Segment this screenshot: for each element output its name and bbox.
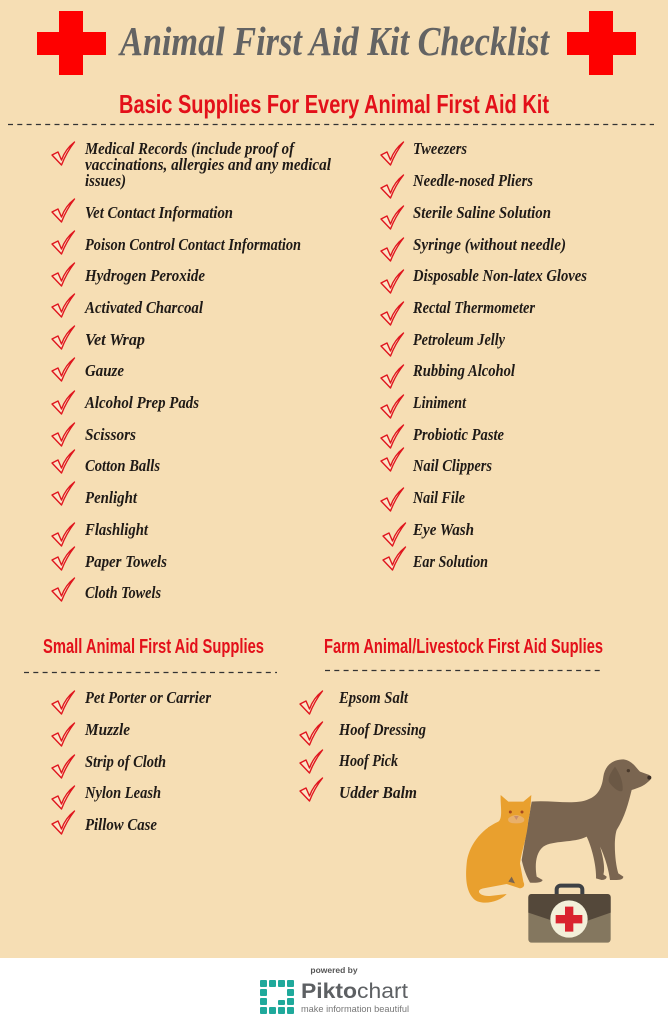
item: pet porter: Pet Porter or Carrier (84, 688, 211, 707)
item: medical records: issues) (85, 171, 126, 190)
heading: small animal supplies: Small Animal First Aid Supplies (43, 636, 264, 658)
icon: cat (466, 795, 531, 903)
item: penlight: Penlight (84, 488, 138, 507)
item: gauze (52, 358, 124, 381)
item: eye wash (383, 520, 474, 546)
item: ear solution (383, 547, 488, 571)
item: medical records (52, 139, 331, 190)
item: poison control: Poison Control Contact Information (84, 235, 301, 254)
item: gloves (381, 266, 587, 293)
item: muzzle: Muzzle (84, 720, 130, 739)
list: basic supplies right column (381, 139, 587, 571)
item: sterile saline (381, 203, 551, 229)
item: muzzle (52, 720, 130, 746)
item: liniment (381, 393, 467, 418)
item: penlight (52, 482, 138, 507)
item: strip of cloth (52, 752, 166, 778)
item: rectal thermometer (381, 298, 535, 325)
item: hoof pick: Hoof Pick (338, 751, 398, 770)
item: nail file: Nail File (412, 488, 465, 507)
item: vet contact (52, 199, 233, 222)
item: medical records: Medical Records (include proof of (84, 139, 296, 158)
tagline: make information beautiful (301, 1004, 409, 1015)
item: probiotic paste (381, 425, 504, 448)
item: gloves: Disposable Non-latex Gloves (412, 266, 587, 285)
wordmark: Piktochart (301, 980, 408, 1003)
item: ear solution: Ear Solution (412, 552, 488, 571)
icon: dog (488, 759, 651, 883)
item: needle-nosed pliers (381, 171, 533, 198)
item: rectal thermometer: Rectal Thermometer (412, 298, 535, 317)
item: flashlight (52, 520, 149, 546)
item: activated charcoal (52, 294, 203, 317)
item: poison control (52, 231, 301, 254)
item: paper towels (52, 547, 167, 571)
item: medical records: vaccinations, allergies and any medical (85, 155, 331, 174)
item: pillow case: Pillow Case (84, 815, 157, 834)
item: scissors: Scissors (85, 425, 136, 444)
powered by text: powered by (310, 965, 358, 975)
title: Animal First Aid Kit Checklist (117, 18, 550, 64)
item: liniment: Liniment (412, 393, 467, 412)
item: pillow case (52, 811, 157, 834)
icon: right red cross (567, 11, 636, 75)
item: cotton balls: Cotton Balls (85, 456, 160, 475)
item: vet wrap: Vet Wrap (85, 330, 145, 349)
item: vet wrap (52, 326, 145, 349)
heading: basic supplies: Basic Supplies For Every Animal First Aid Kit (119, 89, 549, 119)
item: hoof dressing: Hoof Dressing (338, 720, 426, 739)
icon: first aid kit (528, 886, 611, 943)
list: farm animal supplies (300, 688, 426, 802)
item: activated charcoal: Activated Charcoal (84, 298, 203, 317)
item: syringe (381, 235, 566, 261)
item: petroleum jelly: Petroleum Jelly (412, 330, 505, 349)
item: alcohol prep pads (52, 391, 199, 414)
item: rubbing alcohol (381, 361, 515, 388)
item: strip of cloth: Strip of Cloth (85, 752, 166, 771)
icon: left red cross (37, 11, 106, 75)
item: tweezers (381, 139, 467, 165)
item: hydrogen peroxide: Hydrogen Peroxide (84, 266, 205, 285)
item: sterile saline: Sterile Saline Solution (413, 203, 551, 222)
item: paper towels: Paper Towels (84, 552, 167, 571)
item: udder balm: Udder Balm (339, 783, 417, 802)
item: epsom salt: Epsom Salt (338, 688, 409, 707)
item: cloth towels: Cloth Towels (85, 583, 161, 602)
item: rubbing alcohol: Rubbing Alcohol (412, 361, 515, 380)
item: needle-nosed pliers: Needle-nosed Pliers (412, 171, 533, 190)
list: basic supplies left column (52, 139, 331, 602)
item: gauze: Gauze (85, 361, 124, 380)
footer: powered by Piktochart (260, 965, 409, 1015)
item: tweezers: Tweezers (413, 139, 467, 158)
item: nail file (381, 488, 465, 511)
item: nail clippers: Nail Clippers (412, 456, 492, 475)
item: cloth towels (52, 578, 161, 602)
item: flashlight: Flashlight (84, 520, 149, 539)
illustration: cat, dog and first aid kit (466, 759, 651, 943)
item: alcohol prep pads: Alcohol Prep Pads (84, 393, 199, 412)
item: hydrogen peroxide (52, 263, 205, 286)
item: syringe: Syringe (without needle) (413, 235, 566, 254)
item: cotton balls (52, 450, 160, 475)
item: pet porter (52, 688, 211, 714)
icon: Piktochart logo mark (260, 980, 294, 1014)
item: probiotic paste: Probiotic Paste (412, 425, 504, 444)
item: nylon leash: Nylon Leash (84, 783, 161, 802)
item: scissors (52, 423, 136, 446)
list: small animal supplies (52, 688, 211, 834)
item: nail clippers (381, 448, 492, 475)
item: vet contact: Vet Contact Information (85, 203, 233, 222)
item: nylon leash (52, 783, 161, 809)
item: petroleum jelly (381, 330, 505, 356)
item: eye wash: Eye Wash (412, 520, 474, 539)
